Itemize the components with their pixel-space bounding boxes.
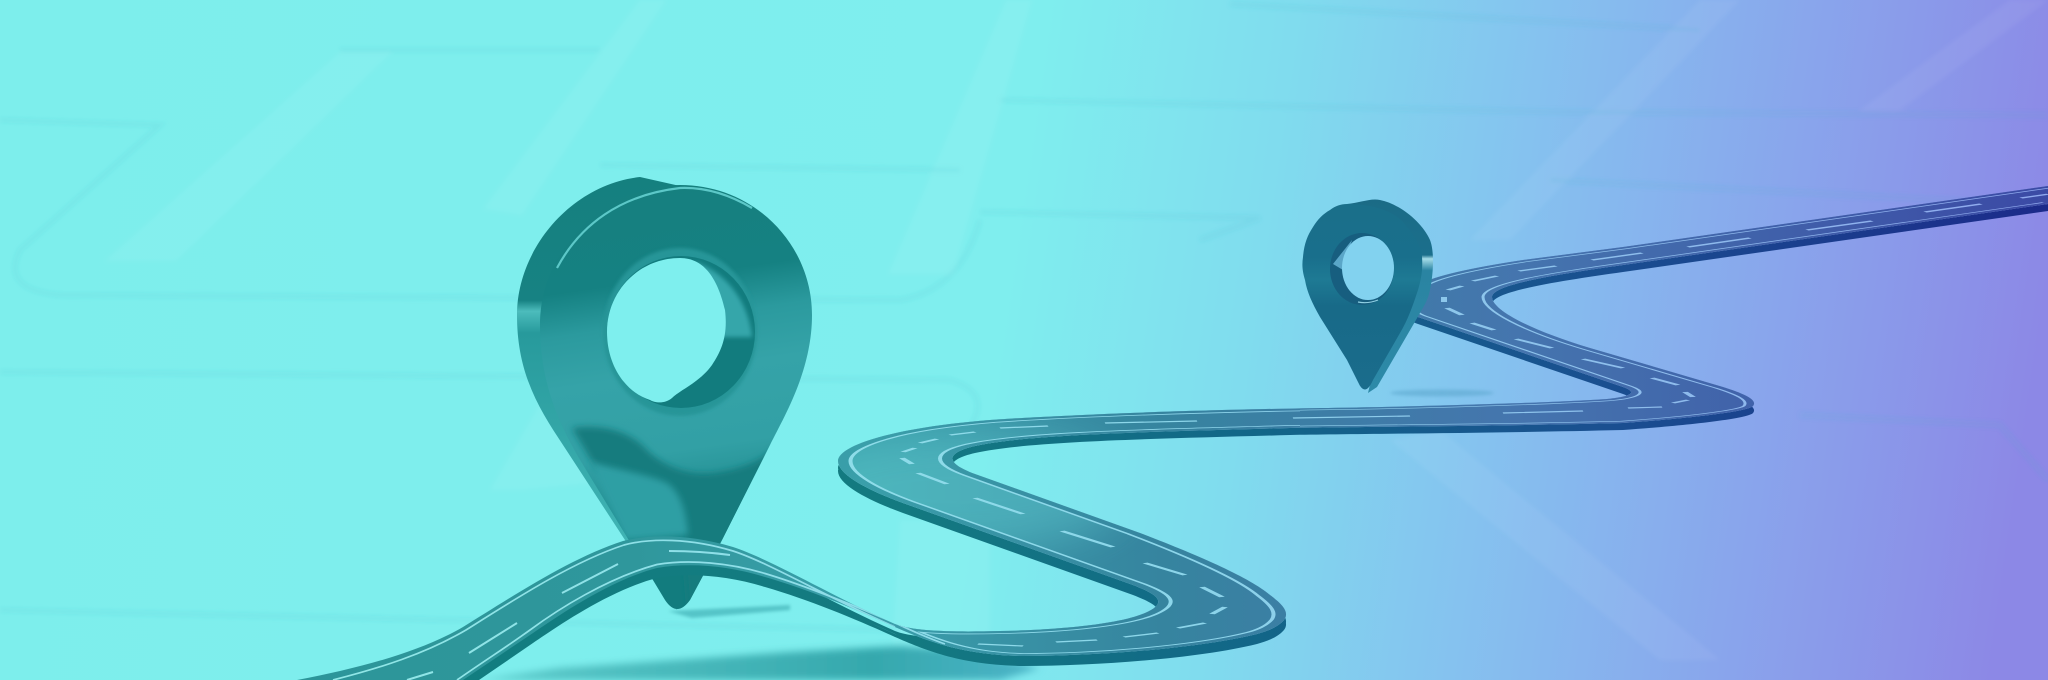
small pin back side xyxy=(1347,200,1433,393)
small location pin xyxy=(1302,200,1433,393)
small pin hole wall xyxy=(1330,233,1394,305)
pin shading xyxy=(571,424,767,604)
shadows on ground xyxy=(480,390,1494,680)
near edge lines xyxy=(838,408,1300,656)
road centre dashes xyxy=(902,194,2048,646)
hill edge lines xyxy=(333,540,945,680)
big location pin xyxy=(517,177,812,630)
hill centre dashes xyxy=(407,551,730,680)
road side thickness, near section xyxy=(463,470,1286,680)
pin front face xyxy=(540,185,812,609)
small pin hole opening xyxy=(1342,236,1394,300)
road surface lighting xyxy=(333,186,2048,680)
winding road xyxy=(297,186,2048,680)
inner wall highlight xyxy=(695,262,752,337)
small pin wall highlight xyxy=(1333,240,1352,270)
road surface xyxy=(297,186,2048,680)
pin back side xyxy=(517,177,700,610)
pin hole bevel xyxy=(603,248,757,416)
road side thickness, general xyxy=(357,193,2048,677)
pin hole opening xyxy=(607,258,726,402)
small pin front face xyxy=(1302,204,1422,390)
far edge lines xyxy=(1300,186,2048,428)
pin hole inner wall xyxy=(607,256,755,408)
pin rim highlight xyxy=(557,188,752,268)
small pin bottom highlight xyxy=(1358,300,1378,303)
